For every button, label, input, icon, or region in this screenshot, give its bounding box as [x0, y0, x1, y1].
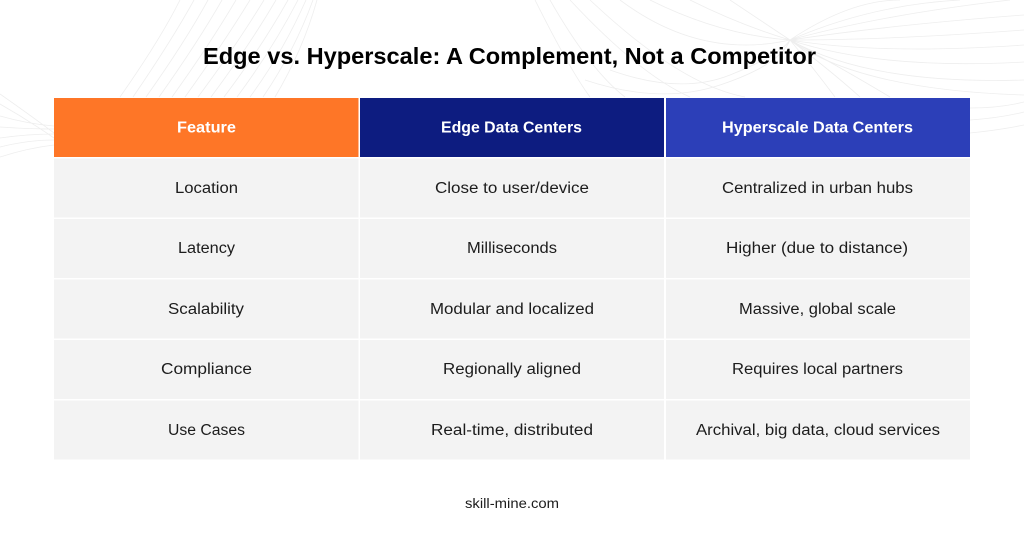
row: Latency: Milliseconds [467, 240, 557, 257]
row: Compliance: Compliance [161, 361, 252, 378]
row: Latency: Higher (due to distance) [726, 240, 908, 257]
row: Latency: Latency [178, 240, 235, 257]
row: Location [54, 158, 970, 218]
row: Scalability: Modular and localized [430, 301, 594, 318]
title: Edge vs. Hyperscale: A Complement, Not a Competitor [203, 43, 816, 69]
header: Edge Data Centers [360, 98, 664, 157]
header: Feature [54, 98, 358, 157]
row: Location: Close to user/device [435, 180, 589, 197]
row: Location: Location [175, 180, 238, 197]
header: Edge Data Centers: Edge Data Centers [441, 120, 582, 136]
header: Hyperscale Data Centers [666, 98, 970, 157]
row: Compliance: Requires local partners [732, 361, 903, 378]
row: Use Cases [54, 400, 970, 460]
row: Location: Centralized in urban hubs [722, 180, 913, 197]
row: Use Cases: Real-time, distributed [431, 422, 593, 439]
row: Latency [54, 219, 970, 278]
row: Scalability [54, 280, 970, 338]
row: Use Cases: Use Cases [168, 422, 245, 439]
row: Scalability: Scalability [168, 301, 244, 318]
row: Use Cases: Archival, big data, cloud services [696, 422, 940, 439]
row: Scalability: Massive, global scale [739, 301, 896, 318]
footer: website: skill-mine.com [465, 496, 559, 511]
row: Compliance: Regionally aligned [443, 361, 581, 378]
header: Feature: Feature [177, 120, 236, 136]
header: Hyperscale Data Centers: Hyperscale Data Centers [722, 120, 913, 136]
row: Compliance [54, 340, 970, 399]
comparison table [54, 98, 970, 460]
